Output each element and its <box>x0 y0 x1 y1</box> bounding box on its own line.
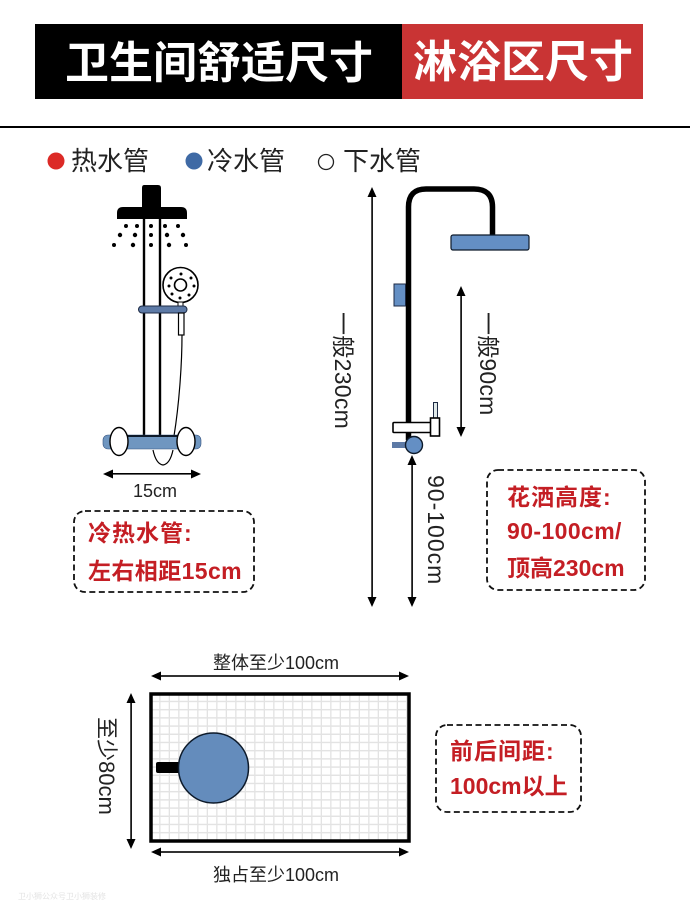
label: bottom width: 独占至少100cm <box>213 865 339 885</box>
arrow: 90-100cm <box>408 455 416 607</box>
shower head circle <box>178 733 248 803</box>
arrow: top width <box>151 672 409 680</box>
valve <box>392 402 440 454</box>
label: total height: 一般230cm <box>330 312 356 429</box>
callout: shower height <box>487 470 645 590</box>
icon: shower head <box>117 185 187 219</box>
callout: front and back spacing: 100cm以上 <box>450 773 568 799</box>
label: 90cm: 一般90cm <box>475 312 501 415</box>
icon: hand shower <box>163 268 198 306</box>
shower arm <box>156 762 182 773</box>
callout: cold and hot pipe spacing <box>74 511 254 592</box>
shower head <box>451 235 529 250</box>
label: 90-100cm: 90-100cm <box>423 475 449 585</box>
floor plan diagram <box>94 653 409 885</box>
hand shower handle <box>178 313 184 335</box>
front view shower diagram <box>103 185 201 501</box>
arrow: 15cm <box>103 470 201 478</box>
label: 15cm: 15cm <box>133 481 177 501</box>
arrow: depth <box>126 693 136 849</box>
wall mount <box>394 284 406 306</box>
legend: hot water: 热水管 <box>71 146 149 176</box>
heading: 淋浴区尺寸: 淋浴区尺寸 <box>413 38 633 87</box>
label: depth: 至少80cm <box>94 717 119 815</box>
callout: shower height: 90-100cm/ <box>507 518 622 544</box>
callout: cold and hot pipe spacing: 左右相距15cm <box>88 558 242 584</box>
callout: front and back spacing <box>436 725 581 812</box>
legend <box>48 146 421 176</box>
legend: drain: 下水管 <box>343 146 421 176</box>
label: top width: 整体至少100cm <box>213 653 339 673</box>
callout: front and back spacing: 前后间距: <box>450 738 555 764</box>
side view shower diagram <box>330 187 529 607</box>
spout <box>153 450 173 465</box>
callout: shower height: 花洒高度: <box>507 484 612 510</box>
mixer valve <box>103 428 201 456</box>
title banner <box>35 24 643 99</box>
callout: shower height: 顶高230cm <box>507 555 625 581</box>
holder bar <box>138 306 187 313</box>
hose <box>174 335 182 436</box>
watermark: 卫小狮公众号卫小狮装修 <box>18 891 106 901</box>
heading: 卫生间舒适尺寸: 卫生间舒适尺寸 <box>65 39 373 88</box>
arrow: bottom width <box>151 848 409 856</box>
callout: cold and hot pipe spacing: 冷热水管: <box>88 520 193 546</box>
pipe <box>408 189 492 422</box>
arrow: 90cm <box>456 286 466 437</box>
water drops <box>112 224 188 247</box>
poles <box>144 215 160 437</box>
arrow: total height <box>368 187 376 607</box>
tiled floor <box>151 694 409 841</box>
legend: cold water: 冷水管 <box>207 146 285 176</box>
